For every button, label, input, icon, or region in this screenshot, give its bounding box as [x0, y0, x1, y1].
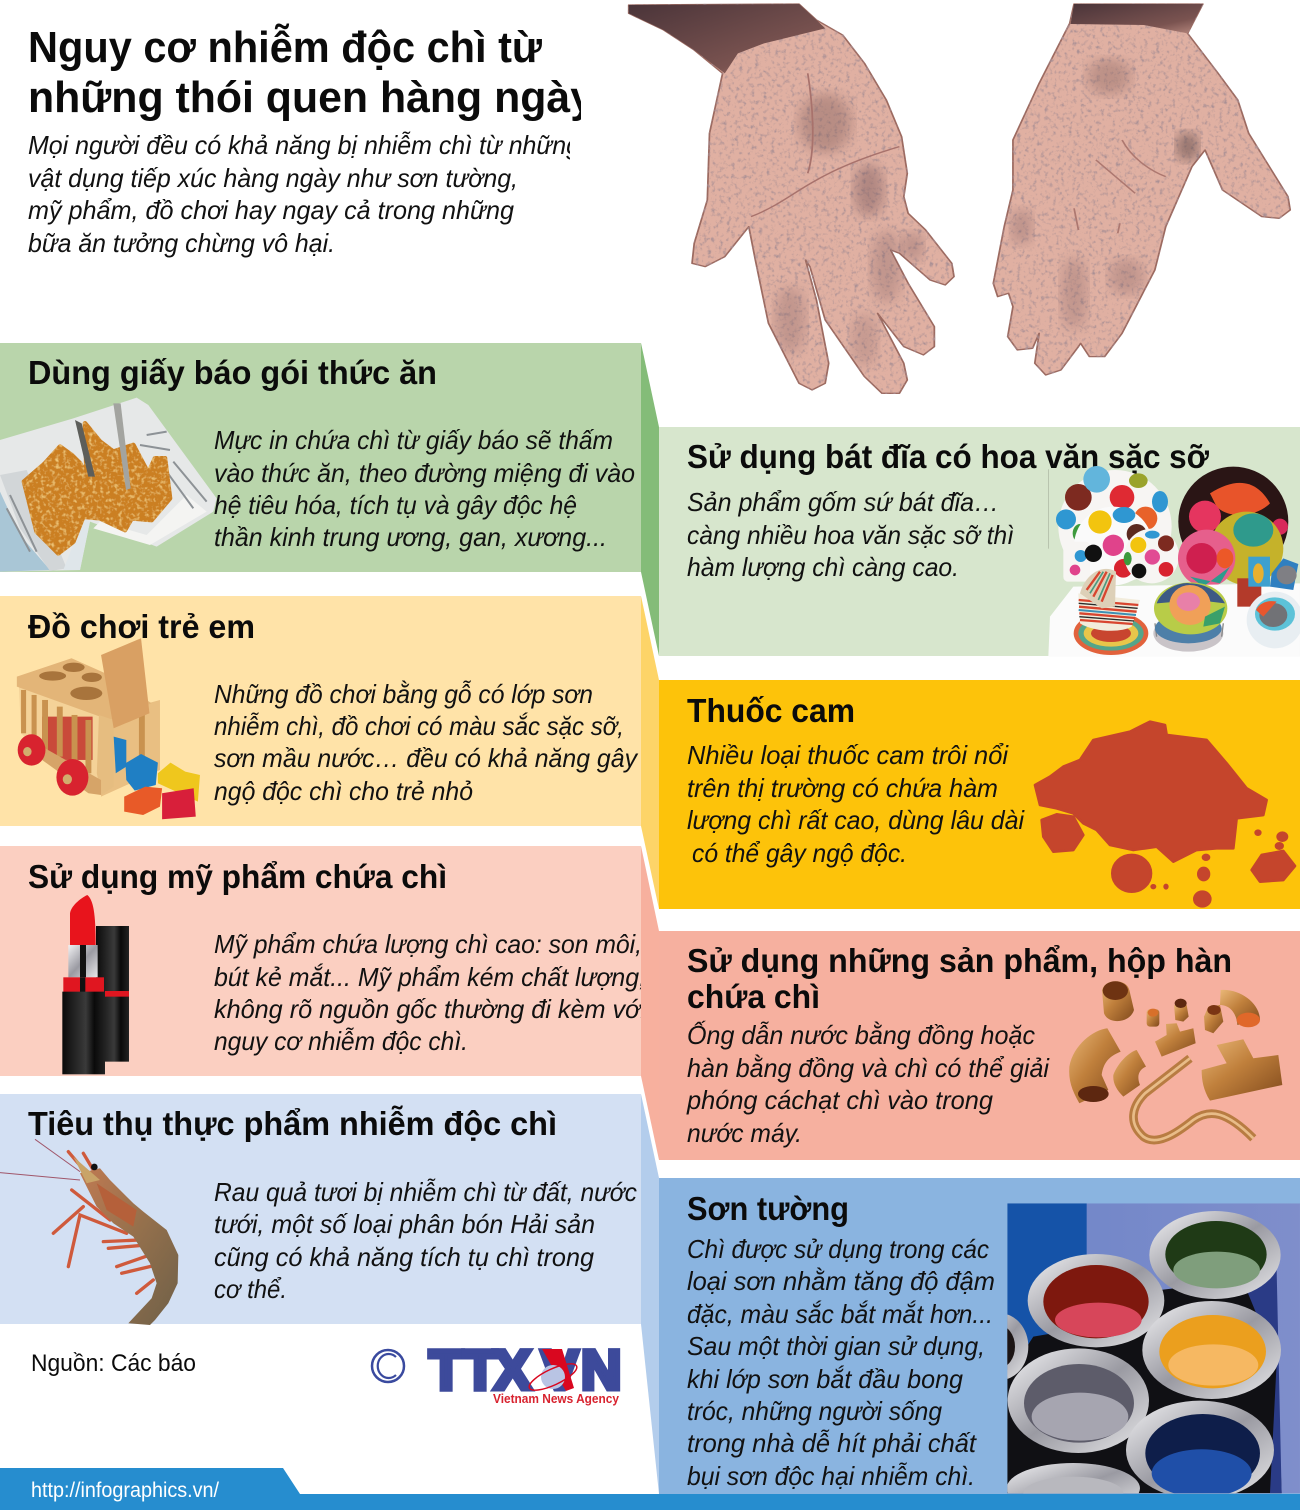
- title: [28, 22, 595, 122]
- body text: bút kẻ mắt... Mỹ phẩm kém chất lượng,: [214, 962, 646, 992]
- icon: fried food on newspaper: [0, 398, 217, 572]
- panel: đồ chơi trẻ em: [0, 596, 659, 909]
- body text: thần kinh trung ương, gan, xương...: [214, 522, 607, 552]
- panel: dùng giấy báo gói thức ăn: [0, 343, 659, 656]
- body text: không rõ nguồn gốc thường đi kèm với: [214, 994, 647, 1024]
- heading: Sử dụng mỹ phẩm chứa chì: [28, 858, 447, 895]
- heading: Thuốc cam: [687, 692, 855, 729]
- intro text: Mọi người đều có khả năng bị nhiễm chì từ những: [28, 130, 581, 160]
- intro text: vật dụng tiếp xúc hàng ngày như sơn tường,: [28, 163, 518, 193]
- body text: tưới, một số loại phân bón Hải sản: [214, 1209, 595, 1239]
- panel: sử dụng mỹ phẩm chứa chì: [0, 846, 659, 1160]
- body text: [686, 1020, 1050, 1148]
- icon: lipstick: [62, 895, 129, 1074]
- heading: Sử dụng những sản phẩm, hộp hàn: [687, 942, 1232, 979]
- body text: càng nhiều hoa văn sặc sỡ thì: [687, 520, 1014, 550]
- body text: Rau quả tươi bị nhiễm chì từ đất, nước: [214, 1177, 637, 1207]
- body text: Nhiều loại thuốc cam trôi nổi: [687, 740, 1009, 770]
- body text: vào thức ăn, theo đường miệng đi vào: [214, 458, 635, 488]
- body text: Sau một thời gian sử dụng,: [687, 1331, 985, 1361]
- source note: Nguồn: Các báo: [31, 1350, 196, 1377]
- body text: lượng chì rất cao, dùng lâu dài: [687, 805, 1025, 835]
- heading: [687, 942, 1232, 1015]
- title: Nguy cơ nhiễm độc chì từ: [28, 22, 542, 72]
- body text: Sản phẩm gốm sứ bát đĩa…: [687, 487, 999, 517]
- body text: bụi sơn độc hại nhiễm chì.: [687, 1461, 975, 1491]
- body text: trong nhà dễ hít phải chất: [687, 1428, 978, 1458]
- body text: ngộ độc chì cho trẻ nhỏ: [214, 776, 473, 806]
- body text: [687, 1234, 995, 1491]
- heading: Dùng giấy báo gói thức ăn: [28, 354, 437, 391]
- body text: nhiễm chì, đồ chơi có màu sắc sặc sỡ,: [214, 711, 624, 741]
- footer bar: [0, 1468, 1300, 1510]
- body text: loại sơn nhằm tăng độ đậm: [687, 1266, 995, 1296]
- logo: TTXVN: Vietnam News Agency: [493, 1392, 619, 1406]
- heading: chứa chì: [687, 978, 820, 1015]
- body text: [214, 679, 639, 806]
- photo: contaminated hands: [629, 4, 1290, 393]
- logo: TTXVN: TTXVN: [429, 1338, 621, 1401]
- body text: đặc, màu sắc bắt mắt hơn...: [687, 1299, 993, 1329]
- body text: nước máy.: [687, 1118, 802, 1148]
- heading: Sơn tường: [687, 1190, 849, 1227]
- panel: sử dụng bát đĩa có hoa văn sặc sỡ: [659, 427, 1300, 657]
- panel: thuốc cam: [659, 680, 1300, 909]
- panel: sơn tường: [659, 1178, 1300, 1510]
- body text: Ống dẫn nước bằng đồng hoặc: [687, 1020, 1035, 1050]
- body text: hệ tiêu hóa, tích tụ và gây độc hệ: [214, 490, 577, 520]
- body text: [687, 487, 1014, 582]
- body text: cơ thể.: [214, 1274, 287, 1304]
- body text: Những đồ chơi bằng gỗ có lớp sơn: [214, 679, 593, 709]
- body text: Chì được sử dụng trong các: [687, 1234, 989, 1264]
- body text: cũng có khả năng tích tụ chì trong: [214, 1242, 595, 1272]
- body text: Mỹ phẩm chứa lượng chì cao: son môi,: [214, 929, 642, 959]
- title: những thói quen hàng ngày: [28, 73, 595, 122]
- panel: tiêu thụ thực phẩm nhiễm độc chì: [0, 1094, 659, 1494]
- footer url: http://infographics.vn/: [31, 1479, 219, 1502]
- panel: sử dụng những sản phẩm, hộp hàn chứa chì: [659, 931, 1300, 1160]
- body text: [214, 929, 647, 1056]
- icon: shrimp: [0, 1139, 178, 1325]
- body text: [214, 1177, 637, 1304]
- photo: paint cans: [1007, 1203, 1300, 1494]
- body text: phóng cáchạt chì vào trong: [686, 1085, 994, 1115]
- body text: Mực in chứa chì từ giấy báo sẽ thấm: [214, 425, 613, 455]
- intro text: mỹ phẩm, đồ chơi hay ngay cả trong những: [28, 195, 515, 225]
- body text: tróc, những người sống: [687, 1396, 943, 1426]
- body text: hàn bằng đồng và chì có thể giải: [687, 1053, 1050, 1083]
- body text: hàm lượng chì càng cao.: [687, 552, 959, 582]
- body text: [687, 740, 1025, 868]
- heading: Sử dụng bát đĩa có hoa văn sặc sỡ: [687, 438, 1210, 475]
- body text: khi lớp sơn bắt đầu bong: [687, 1364, 964, 1394]
- body text: trên thị trường có chứa hàm: [687, 773, 998, 803]
- icon: copper pipes: [1069, 981, 1282, 1140]
- icon: wooden toy truck: [17, 638, 200, 819]
- intro text: [28, 130, 581, 258]
- heading: Tiêu thụ thực phẩm nhiễm độc chì: [28, 1105, 557, 1142]
- body text: sơn mầu nước… đều có khả năng gây: [214, 743, 639, 773]
- icon: colorful plates: [1048, 466, 1300, 657]
- body text: nguy cơ nhiễm độc chì.: [214, 1026, 468, 1056]
- body text: có thể gây ngộ độc.: [692, 838, 907, 868]
- body text: [214, 425, 635, 552]
- icon: orange powder pile: [1035, 722, 1295, 906]
- heading: Đồ chơi trẻ em: [28, 608, 255, 645]
- icon: copyright: [372, 1350, 404, 1382]
- intro text: bữa ăn tưởng chừng vô hại.: [28, 228, 335, 258]
